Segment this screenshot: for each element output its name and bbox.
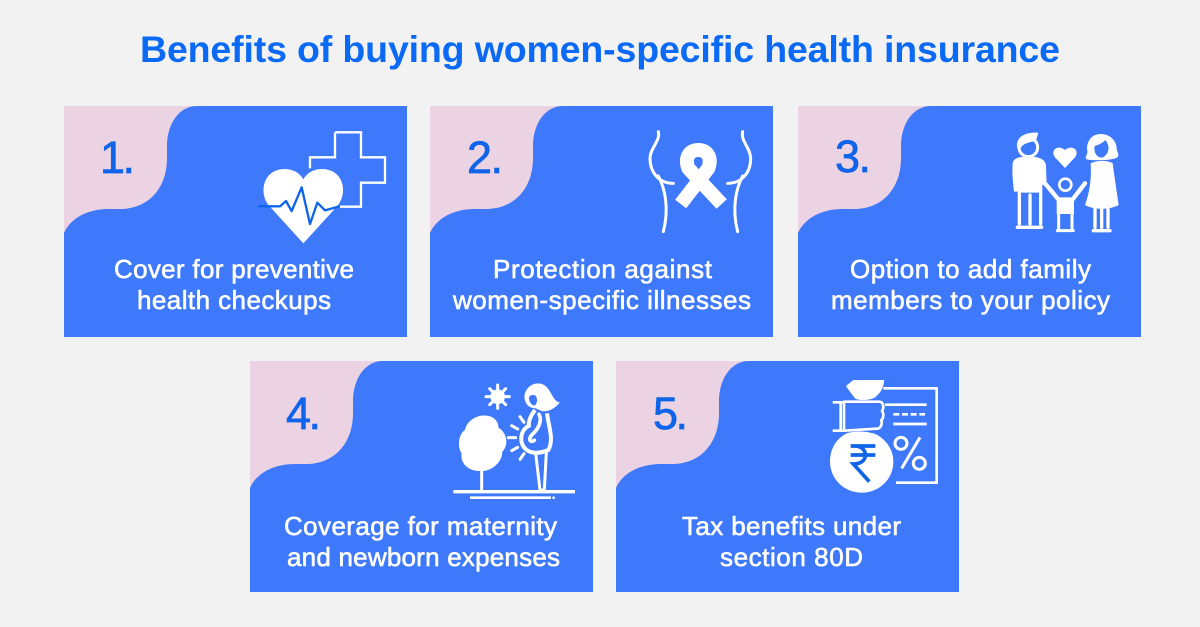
title: Benefits of buying women-specific health insurance	[140, 28, 1060, 70]
bag top	[846, 380, 884, 400]
card text 2: Protection against	[493, 254, 713, 284]
card text 3: Option to add family	[850, 254, 1091, 284]
hand	[844, 402, 883, 431]
number 5: 5.	[653, 388, 688, 439]
card text 5: Tax benefits under	[682, 511, 901, 541]
card text 4	[284, 511, 560, 572]
document	[883, 388, 937, 483]
heart	[1053, 148, 1077, 168]
card text 3: members to your policy	[831, 285, 1110, 315]
man	[1019, 138, 1038, 157]
number 3: 3.	[835, 131, 871, 182]
icon: money bag and tax document	[830, 380, 937, 493]
tree	[459, 416, 506, 471]
card text 5	[682, 511, 901, 572]
icon: family with heart	[1012, 133, 1119, 231]
card text 1: health checkups	[137, 285, 331, 315]
icon: pregnant woman, tree and sun	[453, 383, 575, 499]
child	[1059, 179, 1071, 191]
number 4: 4.	[286, 388, 321, 439]
panel: women-specific illnesses	[430, 106, 773, 337]
icon: heart with medical cross	[258, 132, 385, 243]
card text 4: and newborn expenses	[287, 542, 560, 572]
card text 1	[114, 254, 354, 315]
card text 2: women-specific illnesses	[452, 285, 751, 315]
card text 3	[831, 254, 1110, 315]
bag	[830, 432, 893, 493]
rays	[508, 417, 524, 459]
card text 2	[452, 254, 751, 315]
number 2: 2.	[467, 132, 503, 183]
card text 4: Coverage for maternity	[284, 511, 557, 541]
panel: add family members	[798, 106, 1141, 337]
card text 5: section 80D	[720, 542, 863, 572]
panel: preventive health checkups	[64, 106, 407, 337]
woman	[524, 383, 560, 411]
panel: tax benefits	[616, 361, 959, 592]
woman	[1086, 134, 1118, 160]
percent sign	[902, 437, 920, 468]
card text 1: Cover for preventive	[114, 254, 354, 284]
rupee glyph	[851, 446, 875, 482]
sun	[490, 389, 505, 404]
ground	[453, 487, 575, 497]
number 1: 1.	[100, 132, 135, 183]
panel: maternity and newborn	[250, 361, 593, 592]
icon: torso with awareness ribbon	[650, 132, 751, 232]
